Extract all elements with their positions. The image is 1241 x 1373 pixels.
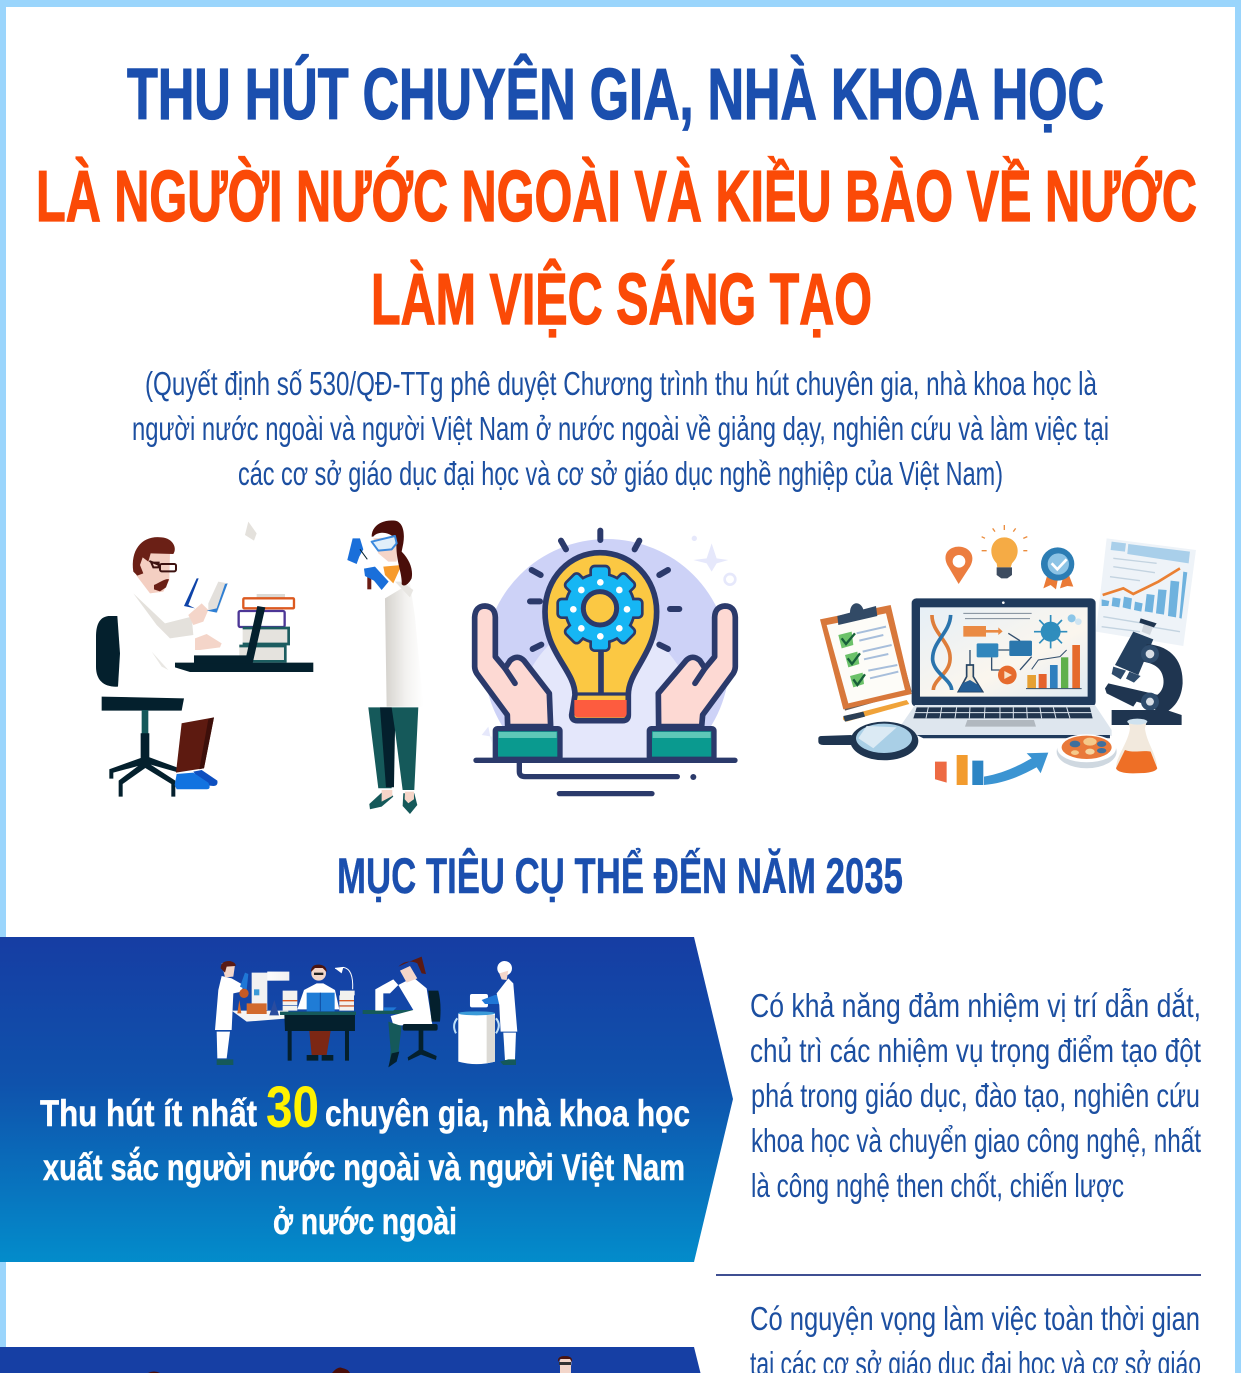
panel text: 30 [266,1075,319,1140]
clipboard [820,603,912,711]
icon: scientist at desk [96,522,313,797]
subtitle text block [132,365,1109,492]
panel: second target (cropped) [0,1347,700,1373]
text block: leadership capability [750,987,1201,1204]
panel text: Thu hút ít nhất [40,1093,257,1134]
pin, bulb, badge [945,525,1074,589]
magnifier [818,722,918,760]
panel text: xuất sắc người nước ngoài và người Việt Nam [43,1146,685,1188]
text block: full-time work [750,1300,1201,1373]
title [36,54,1197,340]
gear [559,567,641,649]
icon: light bulb with gear held by hands [475,531,735,794]
icon: scientist heads [148,1356,572,1373]
panel text: chuyên gia, nhà khoa học [325,1093,690,1134]
icon: woman scientist [347,520,423,814]
growth bars and arrow [935,753,1048,785]
petri dish and flask [1057,719,1157,773]
section heading: MỤC TIÊU CỤ THỂ ĐẾN NĂM 2035 [337,848,903,904]
icon: group of scientists [215,957,517,1067]
panel text: ở nước ngoài [273,1201,457,1242]
laptop [900,598,1112,738]
chart sheet [1096,538,1196,646]
icon: research laptop composition [818,525,1196,785]
title: LÀM VIỆC SÁNG TẠO [371,259,872,340]
microscope [1105,618,1183,725]
panel text [40,1075,690,1242]
panel: target 30 experts [0,937,733,1262]
